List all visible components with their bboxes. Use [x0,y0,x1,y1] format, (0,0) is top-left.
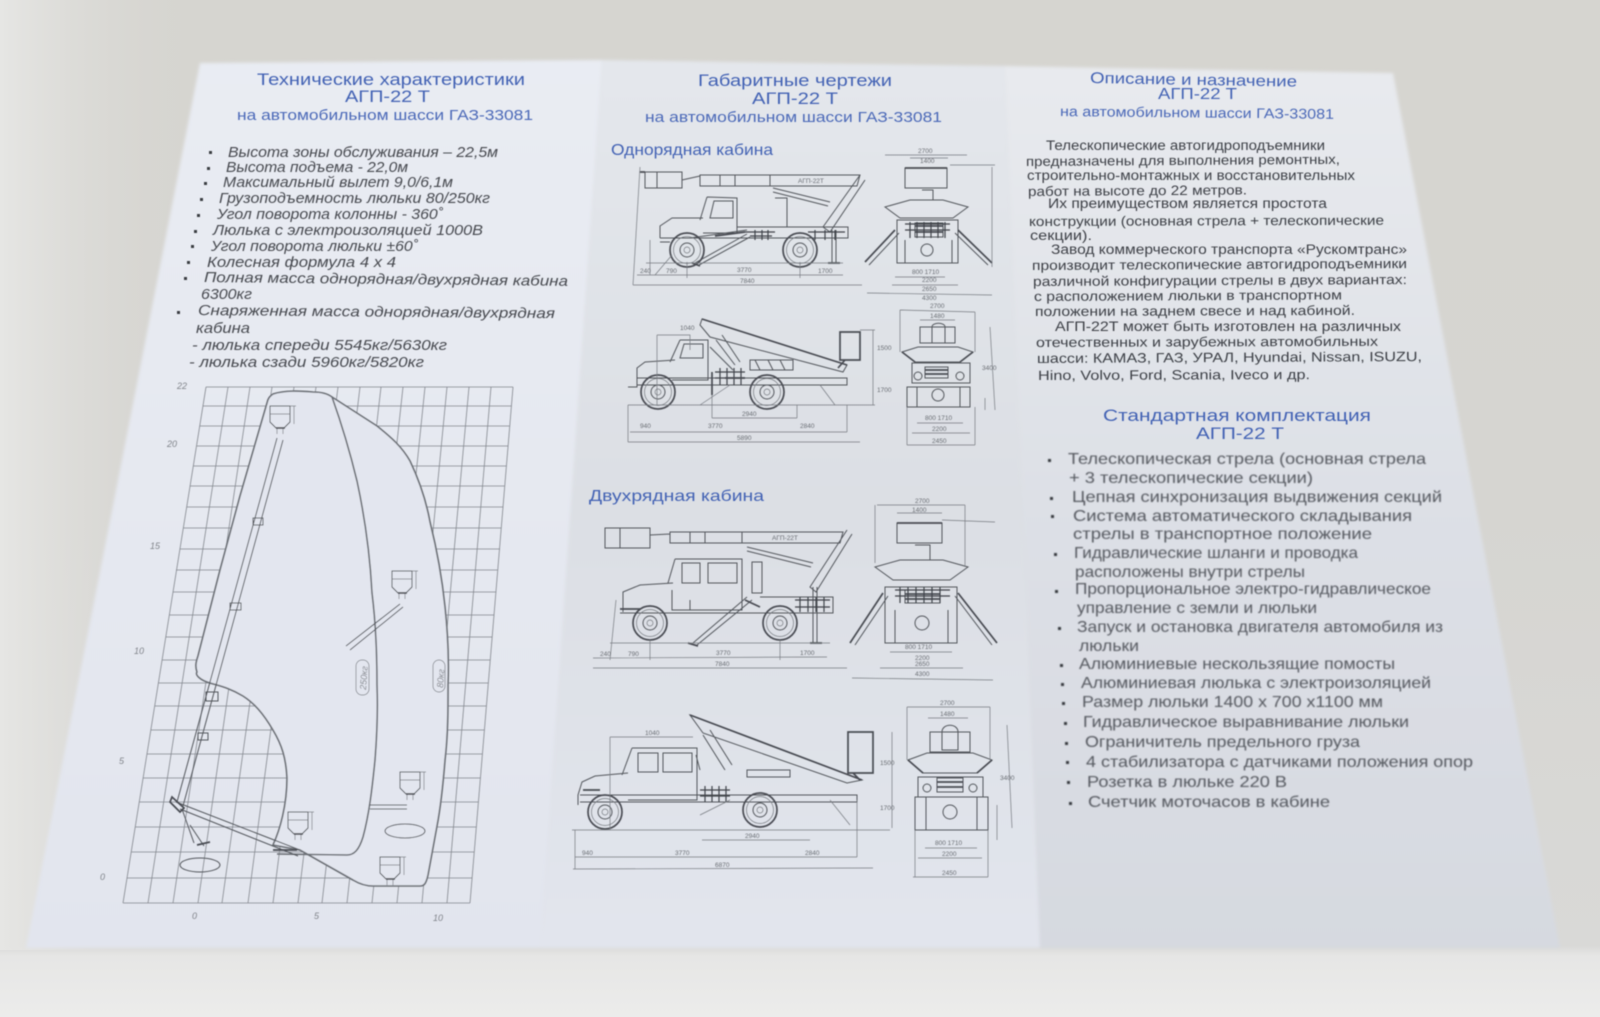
reach envelope [196,391,448,886]
drawing: single cab side view, boom raised: 2940 [742,411,757,418]
description text: секции). [1030,228,1092,243]
specifications list: Максимальный вылет 9,0/6,1м [223,175,453,191]
chart axis labels: 20 [166,439,177,449]
standard equipment list: Телескопическая стрела (основная стрела [1068,451,1426,468]
standard equipment list: Размер люльки 1400 х 700 х1100 мм [1082,694,1383,711]
specifications list: Высота зоны обслуживания – 22,5м [228,145,498,161]
drawing: single cab side view, boom stowed: 240 [640,268,651,275]
heading: description: на автомобильном шасси ГАЗ-33081 [1060,103,1334,122]
specifications list: Высота подъема - 22,0м [226,160,408,176]
chart axis labels: 5 [314,911,320,921]
subheading: single-row cab: Однорядная кабина [611,142,773,159]
chart axis labels [100,381,443,923]
standard equipment list: Гидравлическое выравнивание люльки [1083,714,1409,731]
drawing: double cab side view, boom stowed: 790 [628,651,639,658]
working range chart [100,381,513,923]
specifications list: - люлька сзади 5960кг/5820кг [189,355,424,371]
heading: technical characteristics: на автомобильном шасси ГАЗ-33081 [237,107,533,124]
standard equipment list: люльки [1079,638,1139,655]
standard equipment list: Алюминиевая люлька с электроизоляцией [1081,675,1431,692]
panel: overall drawings [572,71,1015,877]
description text: Завод коммерческого транспорта «Рускомтранс» [1051,242,1407,257]
drawing: single cab rear view, boom stowed: 800 1710 [912,269,939,276]
specifications list: - люлька спереди 5545кг/5630кг [192,338,447,354]
drawing: double cab front view, boom raised: 2700 [940,700,955,707]
description text: с расположением люльки в транспортном [1034,287,1342,304]
drawing: double cab front view, boom raised: 1480 [940,711,955,718]
drawing: double cab rear view, boom stowed: 4300 [915,671,930,678]
heading: technical characteristics: АГП-22 Т [345,87,430,106]
chart axis labels: 10 [433,913,443,923]
heading: description: Описание и назначение [1090,70,1297,91]
specifications list: Колесная формула 4 х 4 [207,255,396,271]
drawing: double cab front view, boom raised: 800 1710 [935,840,962,847]
drawing: single cab rear view, boom stowed: 2700 [918,148,933,155]
standard equipment list: Пропорциональное электро-гидравлическое [1075,581,1431,598]
drawing: single cab side view, boom raised: 940 [640,423,651,430]
description text: АГП-22Т может быть изготовлен на различных [1055,319,1401,334]
panel: description and purpose [1026,70,1473,811]
drawing: double cab side view, boom raised: 1040 [645,730,660,737]
description text: производит телескопические автогидроподъемники [1032,256,1407,273]
specifications list: 6300кг [201,287,252,303]
standard equipment list: Цепная синхронизация выдвижения секций [1072,489,1442,506]
drawing: single cab side view, boom raised [628,319,892,442]
heading: technical characteristics [237,70,533,124]
heading: overall drawings: АГП-22 Т [752,89,838,108]
specifications list: Полная масса однорядная/двухрядная кабина [204,270,568,290]
drawing: double cab side view, boom stowed: 1700 [800,650,815,657]
standard equipment list: Счетчик моточасов в кабине [1088,794,1330,811]
specifications list: Угол поворота люльки ±60˚ [210,239,418,255]
standard equipment list: Розетка в люльке 220 В [1087,774,1287,791]
drawing: double cab rear view, boom stowed: 800 1710 [905,644,932,651]
drawing: double cab side view, boom stowed [593,528,852,668]
specifications list: кабина [196,321,250,337]
drawing: double cab rear view, boom stowed: 2650 [915,661,930,668]
specifications list [177,145,568,371]
drawing: single cab side view, boom stowed: 3770 [737,267,752,274]
drawing: single cab front view, boom raised: 2700 [930,303,945,310]
specifications list: Снаряженная масса однорядная/двухрядная [198,303,555,322]
drawing: double cab front view, boom raised: 2450 [942,870,957,877]
description text: строительно-монтажных и восстановительных [1027,168,1355,183]
drawing: double cab side view, boom raised: 1500 [880,760,895,767]
standard equipment list: Запуск и остановка двигателя автомобиля из [1077,619,1443,636]
standard equipment list: стрелы в транспортное положение [1073,526,1372,543]
chart axis labels: 0 [100,872,105,882]
drawing: double cab rear view, boom stowed [850,498,997,680]
specifications list: Грузоподъемность люльки 80/250кг [219,191,490,207]
chart axis labels: 10 [134,646,144,656]
description text: положении на заднем свесе и над кабиной. [1035,303,1355,319]
drawing: single cab front view, boom raised: 800 1710 [925,415,952,422]
description text: работ на высоте до 22 метров. [1028,182,1247,199]
chart axis labels: 0 [192,911,197,921]
heading: description [1060,70,1334,122]
drawing: single cab rear view, boom stowed: 4300 [922,295,937,302]
drawing: double cab rear view, boom stowed: 2700 [915,498,930,505]
load labels [356,660,446,695]
drawing: single cab rear view, boom stowed: 2650 [922,286,937,293]
standard equipment list: + 3 телескопические секции) [1069,470,1313,487]
drawing: single cab front view, boom raised: 2450 [932,438,947,445]
subheading: double-row cab: Двухрядная кабина [589,488,764,505]
drawing: single cab rear view, boom stowed: 1400 [920,158,935,165]
chart axis labels: 15 [150,541,161,551]
standard equipment list: управление с земли и люльки [1077,600,1317,617]
standard equipment list: Алюминиевые нескользящие помосты [1079,656,1395,673]
drawing: double cab side view, boom raised: 6870 [715,862,730,869]
drawing: double cab rear view, boom stowed: 2200 [915,655,930,662]
standard equipment list: Ограничитель предельного груза [1085,734,1360,751]
drawing: single cab rear view, boom stowed: 2200 [922,277,937,284]
drawing: single cab side view, boom stowed: 790 [666,268,677,275]
drawing: single cab side view, boom raised: 1700 [877,387,892,394]
drawing: single cab front view, boom raised [900,303,997,445]
description text: различной конфигурации стрелы в двух вариантах: [1033,272,1407,289]
heading: description: АГП-22 Т [1158,86,1238,103]
chart grid [123,387,513,903]
description text [1026,138,1422,383]
drawing: single cab side view, boom stowed: 1700 [818,268,833,275]
boom positions [170,438,425,872]
drawing: double cab side view, boom raised: 3770 [675,850,690,857]
drawing: double cab side view, boom stowed: 7840 [715,661,730,668]
description text: Телескопические автогидроподъемники [1046,138,1325,153]
panel: technical characteristics [100,70,568,923]
drawing: single cab front view, boom raised: 1480 [930,313,945,320]
drawing: single cab side view, boom stowed: 7840 [740,278,755,285]
heading: standard equipment: АГП-22 Т [1196,424,1284,443]
drawing: single cab side view, boom raised: 3770 [708,423,723,430]
description text: Их преимуществом является простота [1048,196,1328,211]
drawing: double cab front view, boom raised: 2200 [942,851,957,858]
specifications list: Люлька с электроизоляцией 1000В [212,223,483,239]
drawing: double cab side view, boom raised: 2940 [745,833,760,840]
drawing: double cab side view, boom raised: 1700 [880,805,895,812]
drawing: double cab side view, boom raised: 940 [582,850,593,857]
drawing: single cab side view, boom raised: 1040 [680,325,695,332]
standard equipment list: расположены внутри стрелы [1075,564,1305,581]
drawing: double cab front view, boom raised [907,700,1015,877]
drawing: single cab rear view, boom stowed [865,148,995,302]
chart axis labels: 22 [176,381,187,391]
load labels: 80кг [435,668,446,688]
standard equipment list: Система автоматического складывания [1073,508,1412,525]
description text: предназначены для выполнения ремонтных, [1026,152,1340,169]
drawing: single cab front view, boom raised: 2200 [932,426,947,433]
drawing: single cab side view, boom raised: 2840 [800,423,815,430]
drawing: single cab side view, boom raised: 5890 [737,435,752,442]
description text: отечественных и зарубежных автомобильных [1036,334,1378,350]
specifications list: Угол поворота колонны - 360˚ [216,207,443,223]
heading: overall drawings [645,71,942,126]
drawing: double cab side view, boom stowed: 3770 [716,650,731,657]
standard equipment list: Гидравлические шланги и проводка [1074,545,1358,562]
description text: Hino, Volvo, Ford, Scania, Iveco и др. [1038,367,1310,383]
heading: overall drawings: на автомобильном шасси ГАЗ-33081 [645,109,942,126]
standard equipment list: 4 стабилизатора с датчиками положения опор [1086,754,1473,771]
drawing: double cab front view, boom raised: 3400 [1000,775,1015,782]
drawing: single cab front view, boom raised: 3400 [982,365,997,372]
drawing: single cab side view, boom raised: 1500 [877,345,892,352]
description text: конструкции (основная стрела + телескопические [1029,213,1384,229]
heading: standard equipment: Стандартная комплектация [1103,406,1371,425]
load labels: 250кг [358,665,370,691]
drawing: single cab side view, boom stowed: АГП-22Т [798,178,824,185]
drawing: double cab rear view, boom stowed: 1400 [912,507,927,514]
drawing: single cab side view, boom stowed [633,167,865,285]
heading: overall drawings: Габаритные чертежи [698,71,892,90]
baskets [270,406,426,885]
heading: standard equipment [1103,406,1371,443]
drawing: double cab side view, boom stowed: 240 [600,651,611,658]
drawing: double cab side view, boom raised: 2840 [805,850,820,857]
drawing: double cab side view, boom stowed: АГП-22Т [772,535,798,542]
standard equipment list [1048,451,1473,811]
drawing: double cab side view, boom raised [572,715,895,869]
description text: шасси: КАМАЗ, ГАЗ, УРАЛ, Hyundai, Nissan, ISUZU, [1037,349,1422,366]
heading: technical characteristics: Технические характеристики [257,70,525,89]
chart axis labels: 5 [119,756,125,766]
